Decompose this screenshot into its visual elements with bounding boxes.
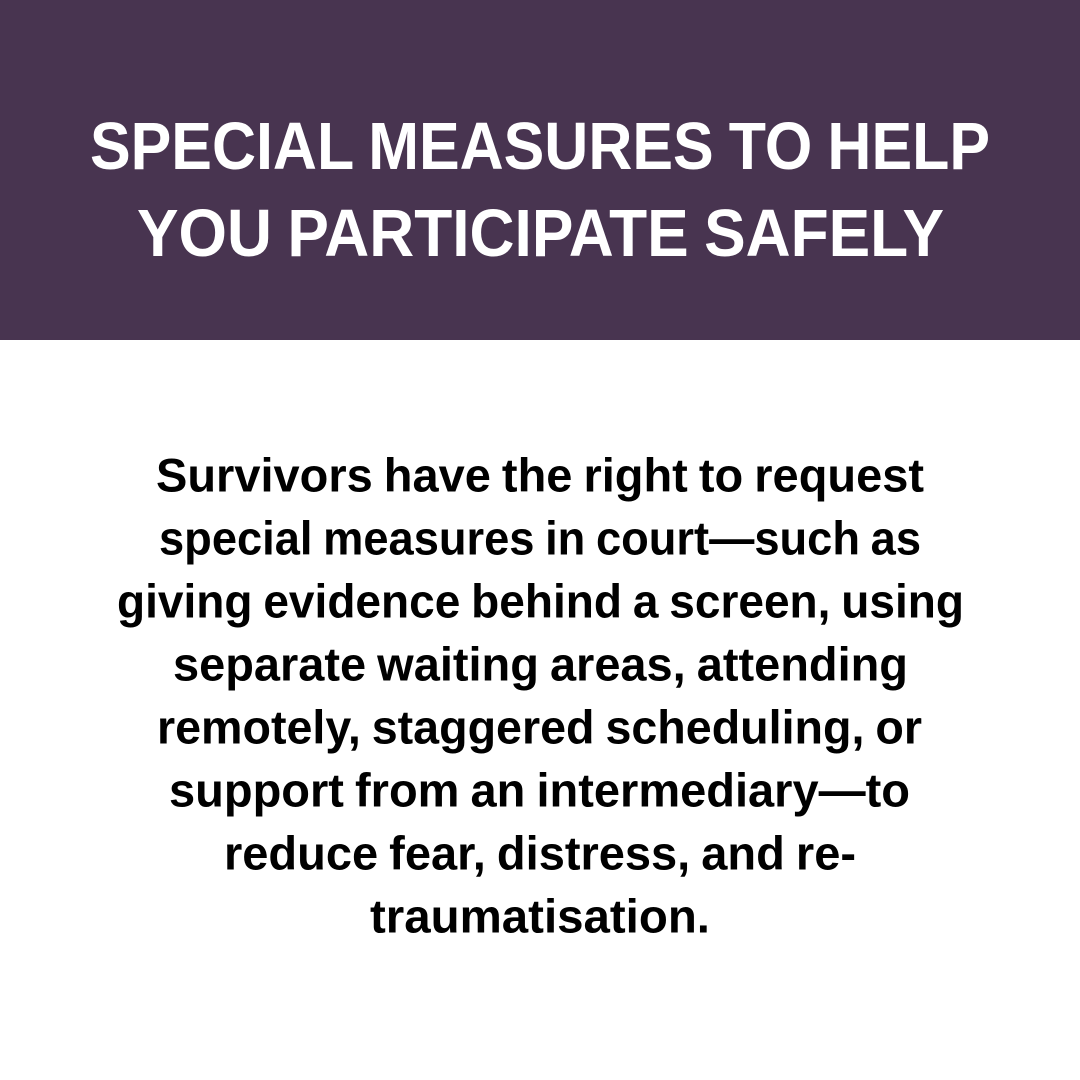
body paragraph bbox=[117, 448, 964, 942]
header banner bbox=[0, 0, 1080, 340]
body paragraph: separate waiting areas, attending bbox=[173, 638, 908, 690]
title bbox=[90, 109, 990, 271]
body paragraph: remotely, staggered scheduling, or bbox=[157, 700, 922, 754]
body paragraph: reduce fear, distress, and re- bbox=[224, 826, 856, 880]
body paragraph: special measures in court—such as bbox=[159, 512, 921, 564]
title: YOU PARTICIPATE SAFELY bbox=[137, 196, 944, 271]
body paragraph: support from an intermediary—to bbox=[169, 764, 910, 816]
body paragraph: Survivors have the right to request bbox=[156, 448, 924, 502]
body paragraph: giving evidence behind a screen, using bbox=[117, 574, 964, 628]
title: SPECIAL MEASURES TO HELP bbox=[90, 109, 990, 184]
body paragraph: traumatisation. bbox=[370, 890, 710, 942]
